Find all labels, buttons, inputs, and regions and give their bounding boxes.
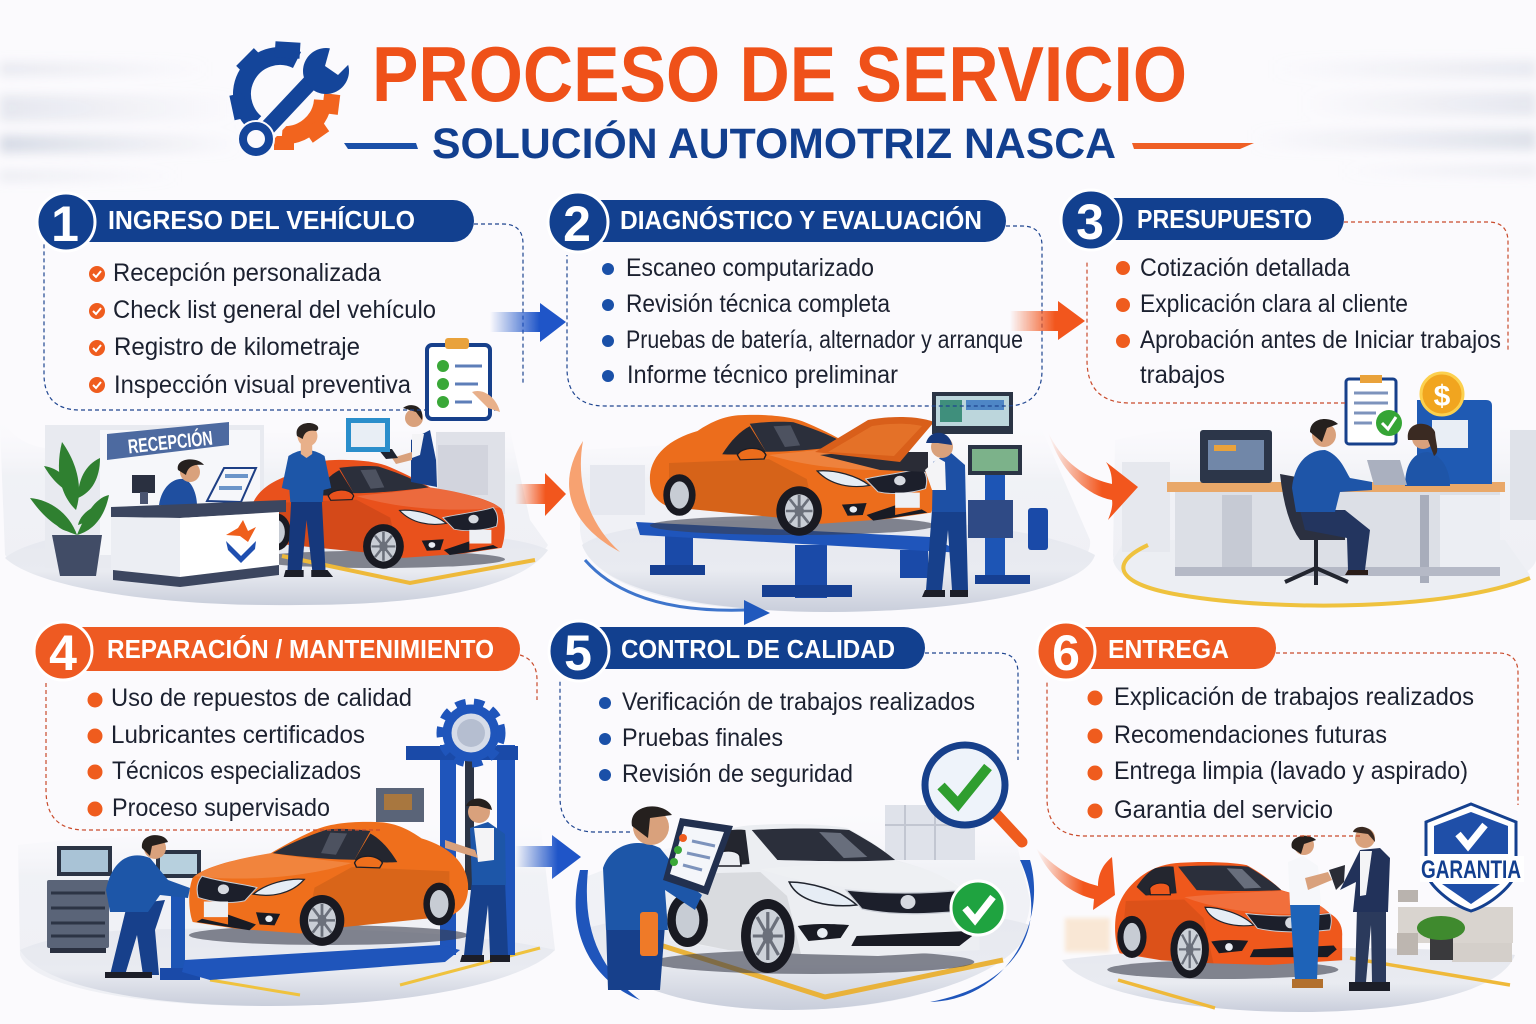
- header pill 6: [1037, 622, 1276, 681]
- yellow floor frame: [660, 945, 1003, 997]
- bullet list 6: Entrega limpia (lavado y aspirado): [1114, 757, 1468, 785]
- bullet list 4: Lubricantes certificados: [111, 721, 365, 749]
- panel 6: entrega: [1036, 622, 1524, 1012]
- header pill 4: 4: [49, 625, 77, 681]
- logo: gear and wrench: [232, 42, 350, 157]
- header pill 6: ENTREGA: [1108, 634, 1229, 664]
- bullet list 6: Recomendaciones futuras: [1114, 721, 1387, 749]
- subtitle rule blue: [344, 143, 418, 149]
- panel 5: control de calidad: [549, 621, 1034, 1010]
- arrow: 4 to 5: [515, 835, 581, 879]
- inspector with tablet: [603, 806, 733, 990]
- bullet list 3: Aprobación antes de Iniciar trabajos: [1140, 326, 1501, 354]
- dashed outline 4: [46, 655, 537, 830]
- technician with tablet: [346, 405, 437, 487]
- header pill 4: REPARACIÓN / MANTENIMIENTO: [107, 634, 494, 664]
- bullet list 1: Registro de kilometraje: [114, 333, 360, 361]
- header pill 2: DIAGNÓSTICO Y EVALUACIÓN: [620, 205, 982, 235]
- panel 4 scene: [18, 703, 555, 1006]
- subtitle: SOLUCIÓN AUTOMOTRIZ NASCA: [432, 119, 1116, 168]
- icon: clipboard checklist: [427, 338, 500, 419]
- bullet list 5: Pruebas finales: [622, 724, 783, 752]
- equipment on desk: [1200, 430, 1272, 483]
- blue curve arrow: [585, 560, 770, 625]
- header pill 2: [548, 192, 1006, 252]
- dashed outline 3: [1087, 222, 1508, 403]
- bullet list 3: trabajos: [1140, 361, 1225, 389]
- keys: [1329, 865, 1345, 890]
- bullet list 3: Explicación clara al cliente: [1140, 290, 1408, 318]
- arrow: 5 to 6: [1036, 848, 1115, 910]
- red car: [250, 460, 505, 569]
- reception sign: [107, 422, 229, 460]
- client: [1288, 835, 1332, 988]
- dashed outline 5: [560, 653, 1018, 832]
- diagnostic station: [932, 392, 1048, 584]
- header pill 2: 2: [563, 196, 591, 252]
- orange car on lift: [189, 822, 468, 946]
- mechanic left: [105, 835, 190, 978]
- dashed outline 2: [567, 226, 1042, 406]
- orange gear arc: [282, 100, 339, 150]
- bullet list 2: Pruebas de batería, alternador y arranque: [626, 326, 1023, 354]
- icon: green check badge: [951, 881, 1005, 935]
- lift tower with gear: [182, 703, 518, 980]
- header pill 3: 3: [1076, 194, 1104, 250]
- adviser in suit: [1340, 827, 1390, 991]
- orange curve: [569, 441, 620, 552]
- desk: [1167, 482, 1505, 583]
- mechanic right: [445, 799, 510, 962]
- potted plant: [1417, 916, 1465, 960]
- blue arc: [930, 860, 1034, 1002]
- header pill 3: PRESUPUESTO: [1137, 204, 1312, 234]
- dashed outline 1: [44, 224, 523, 410]
- shelving and boxes: [1397, 890, 1513, 962]
- bullet list 5: Verificación de trabajos realizados: [622, 688, 975, 716]
- reception desk: [111, 500, 286, 587]
- bullet list 3: [1116, 254, 1501, 389]
- tool cabinet with monitor: [47, 846, 112, 953]
- panel 4: reparación / mantenimiento: [18, 622, 555, 1006]
- bullet list 4: [88, 684, 412, 822]
- panel 6 scene: [1062, 804, 1524, 1012]
- diagnostic stand: [156, 850, 201, 980]
- header pill 1: [37, 193, 474, 252]
- floor line: [1118, 958, 1510, 1008]
- header pill 1: INGRESO DEL VEHÍCULO: [108, 205, 415, 235]
- bullet list 2: Revisión técnica completa: [626, 290, 890, 318]
- dashed outline 6: [1047, 653, 1518, 836]
- panel 3 scene: [1113, 373, 1536, 607]
- bullet list 6: Garantia del servicio: [1114, 796, 1333, 824]
- icon: garantia shield: [1420, 804, 1524, 911]
- header pill 5: 5: [564, 625, 592, 681]
- header pill 1: 1: [51, 196, 79, 252]
- lift platform: [636, 522, 964, 598]
- subtitle rule orange: [1132, 143, 1254, 149]
- bullet list 1: [89, 259, 436, 399]
- panel 2 scene: [569, 392, 1095, 625]
- header pill 3: [1061, 190, 1344, 250]
- bullet list 3: Cotización detallada: [1140, 254, 1350, 282]
- title: PROCESO DE SERVICIO: [372, 30, 1187, 118]
- bullet list 2: Escaneo computarizado: [626, 254, 874, 282]
- yellow floor arc: [1123, 545, 1530, 606]
- bullet list 4: Uso de repuestos de calidad: [111, 684, 412, 712]
- panel 3: presupuesto: [1061, 190, 1536, 607]
- kiosk with coin: [1417, 373, 1492, 484]
- bullet list 6: Explicación de trabajos realizados: [1114, 683, 1474, 711]
- arrow: 1 to 2 top: [490, 303, 566, 342]
- floor lines: [282, 556, 535, 583]
- arrow: 2 to 3 lower curved: [1048, 432, 1138, 520]
- header pill 4: [34, 622, 520, 681]
- bullet list 5: Revisión de seguridad: [622, 760, 853, 788]
- header pill 5: [549, 621, 925, 681]
- orange car: [1107, 862, 1342, 979]
- navy gear arc: [232, 42, 297, 128]
- bullet list 1: Recepción personalizada: [113, 259, 381, 287]
- header pill 6: 6: [1052, 625, 1080, 681]
- bullet list 4: Proceso supervisado: [112, 794, 330, 822]
- mechanic: [922, 433, 968, 597]
- adviser: [282, 423, 333, 577]
- header pill 5: CONTROL DE CALIDAD: [621, 634, 895, 664]
- bullet list 1: Check list general del vehículo: [113, 296, 436, 324]
- arrow: 1 to 2 lower: [515, 473, 566, 516]
- bullet list 4: Técnicos especializados: [112, 757, 361, 785]
- bullet list 2: Informe técnico preliminar: [627, 361, 898, 389]
- icon: magnifier with check: [925, 745, 1022, 842]
- plant: [30, 442, 109, 576]
- bullet list 5: [599, 688, 975, 788]
- panel 1: ingreso del vehículo: [0, 193, 548, 605]
- client on chair: [1280, 419, 1372, 585]
- car on lift with open hood: [650, 415, 935, 536]
- panel 1 scene: [0, 405, 548, 605]
- kiosk with coin: $: [1434, 380, 1451, 413]
- reception sign: RECEPCIÓN: [127, 426, 214, 458]
- arrow: 2 to 3 top: [1010, 301, 1085, 340]
- bullet list 2: [602, 254, 1023, 389]
- white car: [653, 824, 980, 974]
- bullet list 1: Inspección visual preventiva: [114, 371, 411, 399]
- document with check: [1346, 375, 1402, 444]
- adviser woman with laptop: [1367, 424, 1450, 486]
- receptionist with laptop: [132, 459, 256, 505]
- bullet list 6: [1088, 683, 1474, 824]
- panel 2: diagnóstico y evaluación: [548, 192, 1095, 625]
- panel 5 scene: [576, 745, 1034, 1010]
